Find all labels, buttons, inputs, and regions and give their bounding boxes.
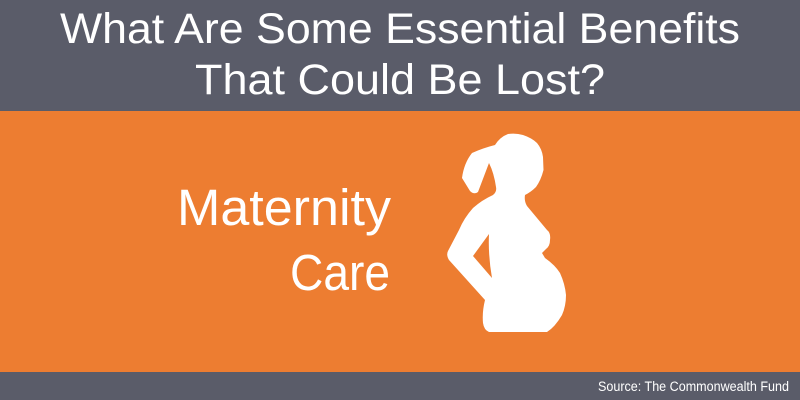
title bbox=[60, 5, 740, 104]
heading: Maternity Care: Care bbox=[290, 244, 390, 301]
heading: Maternity Care: Maternity bbox=[177, 179, 392, 236]
heading: Maternity Care bbox=[177, 179, 392, 301]
source note: Source: The Commonwealth Fund bbox=[598, 379, 789, 394]
panel: footer bar bbox=[0, 372, 800, 400]
title: That Could Be Lost? bbox=[195, 56, 605, 104]
icon: pregnant woman silhouette bbox=[447, 134, 566, 332]
panel: orange background bbox=[0, 111, 800, 372]
panel: title banner bbox=[0, 0, 800, 111]
title: What Are Some Essential Benefits bbox=[60, 5, 740, 53]
